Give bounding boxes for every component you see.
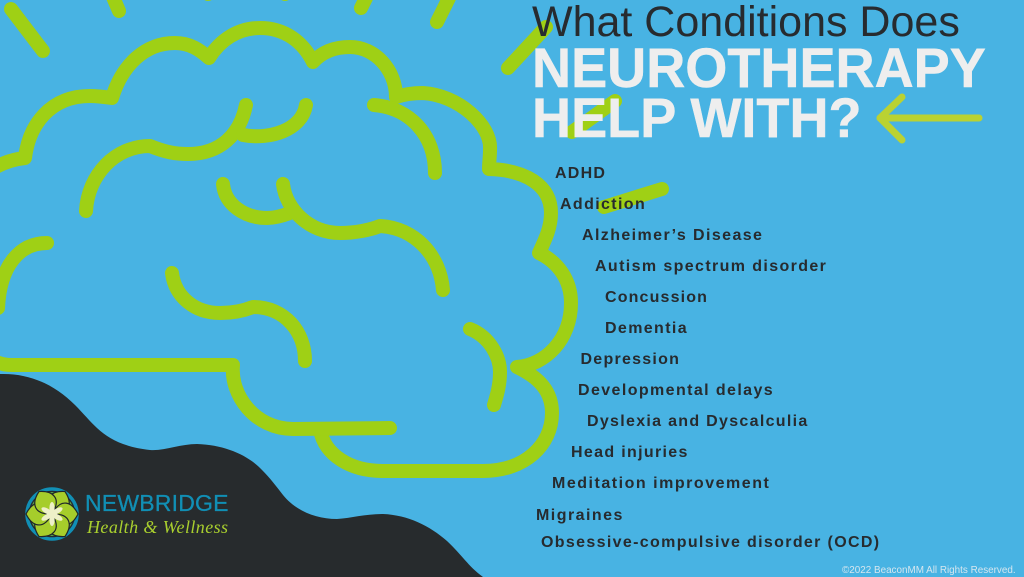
item: Developmental delays bbox=[578, 382, 774, 399]
item: Head injuries bbox=[571, 444, 689, 461]
copyright: ©2022 BeaconMM All Rights Reserved. bbox=[842, 565, 1016, 576]
fold: right bbox=[470, 329, 500, 405]
item: ADHD bbox=[555, 165, 606, 182]
ray: addiction bbox=[604, 189, 662, 207]
logo icon bbox=[26, 486, 78, 542]
dark corner shape bbox=[0, 374, 483, 577]
fold: upper centre bbox=[243, 105, 306, 136]
item: Dyslexia and Dyscalculia bbox=[587, 413, 809, 430]
ray: top right bbox=[437, 0, 449, 22]
item: Addiction bbox=[560, 196, 646, 213]
logo wordmark: NEWBRIDGE bbox=[85, 490, 229, 516]
brain lower lobe bbox=[0, 362, 390, 429]
item: Depression bbox=[580, 351, 680, 368]
fold: upper left bbox=[86, 105, 246, 211]
ray: help bbox=[572, 101, 615, 132]
logo tagline: Health & Wellness bbox=[87, 517, 228, 537]
title line 3: HELP WITH? bbox=[532, 86, 862, 149]
conditions list bbox=[536, 165, 880, 551]
item: Alzheimer’s Disease bbox=[582, 227, 763, 244]
title line 2: NEUROTHERAPY bbox=[532, 36, 986, 99]
item: Meditation improvement bbox=[552, 475, 770, 492]
ray: top bbox=[113, 0, 119, 11]
ray: top centre bbox=[361, 0, 366, 8]
item: Obsessive-compulsive disorder (OCD) bbox=[541, 534, 880, 551]
fold: lower bbox=[172, 273, 305, 361]
brain outline bbox=[0, 28, 571, 471]
ray: title bbox=[508, 27, 546, 68]
fold: upper right bbox=[374, 105, 435, 173]
item: Autism spectrum disorder bbox=[595, 258, 827, 275]
fold: left edge bbox=[0, 243, 47, 308]
fold: middle bbox=[223, 184, 290, 218]
item: Concussion bbox=[605, 289, 708, 306]
item: Dementia bbox=[605, 320, 688, 337]
fold: middle long bbox=[283, 184, 443, 290]
ray: top left bbox=[11, 9, 43, 51]
arrow bbox=[880, 97, 979, 140]
item: Migraines bbox=[536, 507, 624, 524]
